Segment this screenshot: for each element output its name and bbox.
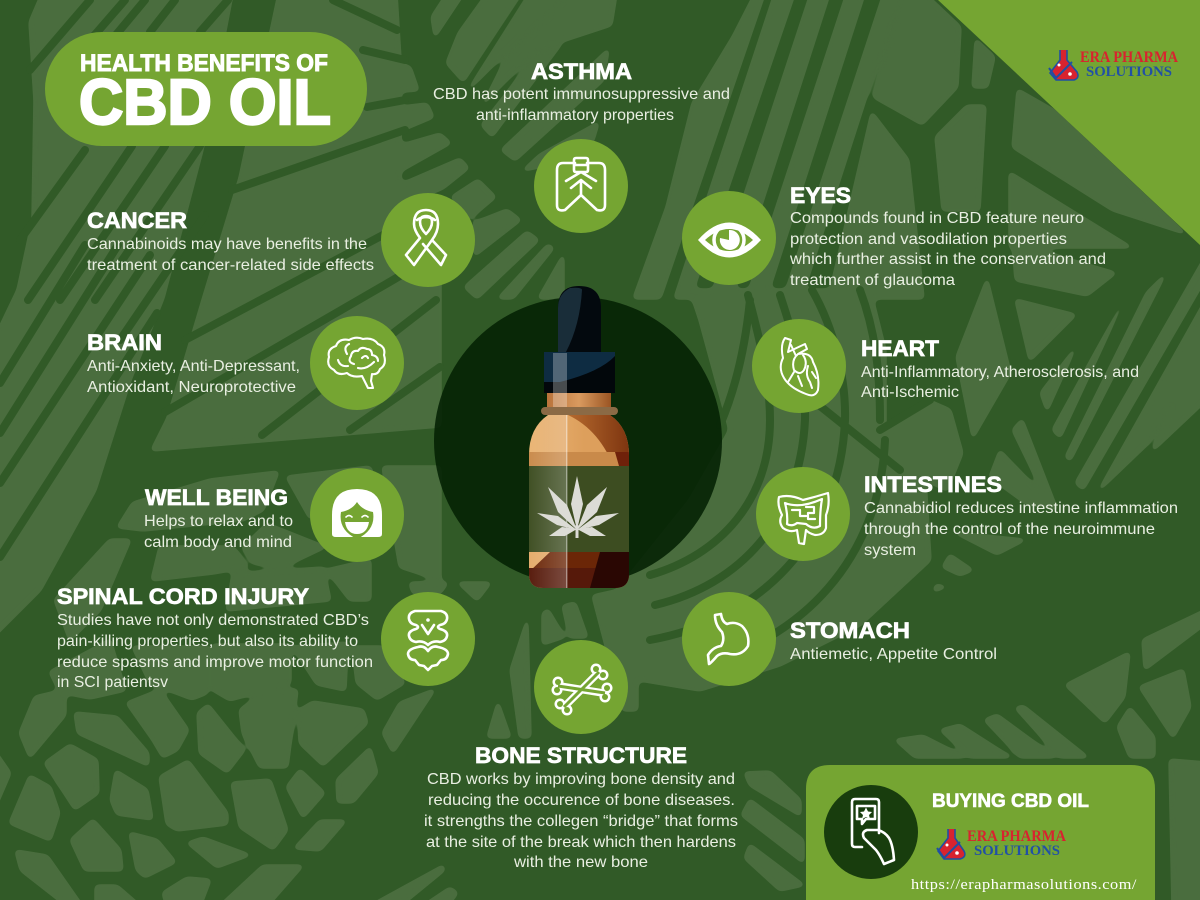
benefit: cancer: CANCER: [87, 208, 187, 233]
benefit: intestines: system: [864, 542, 916, 559]
icon: heart: [752, 319, 846, 413]
collar: [544, 352, 615, 393]
body: [529, 410, 629, 590]
neck ring: [541, 407, 618, 415]
benefit: heart: [752, 319, 1139, 413]
benefit: asthma: CBD has potent immunosuppressive and: [433, 86, 730, 103]
benefit: brain: BRAIN: [87, 330, 162, 355]
benefit: asthma: ASTHMA: [531, 59, 632, 84]
logo: Era Pharma bottom: [937, 828, 1067, 859]
benefit: bone structure: reducing the occurence of bone diseases.: [428, 792, 735, 809]
icon: brain: [310, 316, 404, 410]
logo: Era Pharma top: ERA PHARMA: [1080, 49, 1179, 66]
benefit: well being: WELL BEING: [145, 485, 288, 510]
dropper bottle: [529, 286, 629, 590]
benefit: eyes: protection and vasodilation properties: [790, 231, 1067, 248]
cannabis leaf: [537, 476, 619, 538]
title text: CBD OIL: [79, 66, 331, 138]
benefit: spinal cord injury: in SCI patientsv: [57, 674, 168, 691]
benefit: spinal cord injury: [57, 584, 475, 691]
benefit: bone structure: [424, 640, 738, 871]
benefit: asthma: [433, 59, 730, 233]
benefit: heart: Anti-Ischemic: [861, 384, 959, 401]
icon: intestines: [756, 467, 850, 561]
benefit: brain: Antioxidant, Neuroprotective: [87, 379, 296, 396]
benefit: bone structure: BONE STRUCTURE: [475, 743, 687, 768]
benefit: eyes: EYES: [790, 183, 851, 208]
benefit: stomach: STOMACH: [790, 618, 910, 643]
benefit: heart: HEART: [861, 336, 940, 361]
benefit: intestines: INTESTINES: [864, 472, 1002, 497]
benefit: bone structure: CBD works by improving bone density and: [427, 771, 735, 788]
icon: bones: [534, 640, 628, 734]
logo: Era Pharma top: SOLUTIONS: [1086, 64, 1172, 80]
benefit: eyes: [682, 183, 1106, 289]
benefit: spinal cord injury: reduce spasms and improve motor function: [57, 654, 373, 671]
benefit: cancer: Cannabinoids may have benefits in the: [87, 236, 367, 253]
benefit: eyes: Compounds found in CBD feature neuro: [790, 210, 1084, 227]
icon: smiling face: [310, 468, 404, 562]
benefit: brain: [87, 316, 404, 410]
bulb: [558, 286, 601, 352]
benefit: bone structure: at the site of the break which then hardens: [426, 834, 736, 851]
benefit: asthma: anti-inflammatory properties: [476, 107, 674, 124]
benefit: eyes: treatment of glaucoma: [790, 272, 955, 289]
benefit: well being: [144, 468, 404, 562]
icon: eye: [682, 191, 776, 285]
benefit: intestines: Cannabidiol reduces intestine inflammation: [864, 500, 1178, 517]
benefit: spinal cord injury: SPINAL CORD INJURY: [57, 584, 309, 609]
icon: phone in hand: [824, 785, 918, 879]
benefit: bone structure: with the new bone: [513, 854, 648, 871]
panel heading: BUYING CBD OIL: [932, 791, 1089, 812]
highlight: [553, 353, 567, 407]
benefit: intestines: through the control of the neuroimmune: [864, 521, 1155, 538]
central dark circle: [434, 297, 722, 585]
top-right corner triangle: [938, 0, 1200, 245]
benefit: eyes: which further assist in the conservation and: [789, 251, 1106, 268]
icon: lungs: [534, 139, 628, 233]
panel: buying CBD oil: [806, 765, 1155, 900]
benefit: brain: Anti-Anxiety, Anti-Depressant,: [87, 358, 300, 375]
benefit: cancer: treatment of cancer-related side effects: [87, 257, 374, 274]
benefit: well being: Helps to relax and to: [144, 513, 293, 530]
benefit: intestines: [756, 467, 1178, 561]
benefit: stomach: Antiemetic, Appetite Control: [790, 646, 997, 663]
website url: https://erapharmasolutions.com/: [911, 877, 1137, 893]
icon: spine: [381, 592, 475, 686]
logo: Era Pharma bottom: SOLUTIONS: [974, 843, 1060, 859]
benefit: well being: calm body and mind: [144, 534, 292, 551]
icon: ribbon: [381, 193, 475, 287]
neck: [547, 393, 611, 409]
benefit: cancer: [87, 193, 475, 287]
benefit: spinal cord injury: pain-killing properties, but also its ability to: [57, 633, 358, 650]
icon: stomach: [682, 592, 776, 686]
title pill: [45, 32, 367, 146]
benefit: bone structure: it strengths the collegen “bridge” that forms: [424, 813, 738, 830]
logo: Era Pharma bottom: ERA PHARMA: [967, 828, 1067, 845]
benefit: stomach: [682, 592, 997, 686]
title text: HEALTH BENEFITS OF: [80, 50, 328, 77]
benefit: spinal cord injury: Studies have not only demonstrated CBD’s: [57, 612, 369, 629]
benefit: heart: Anti-Inflammatory, Atherosclerosis, and: [861, 364, 1139, 381]
logo: Era Pharma top: [1049, 49, 1179, 80]
